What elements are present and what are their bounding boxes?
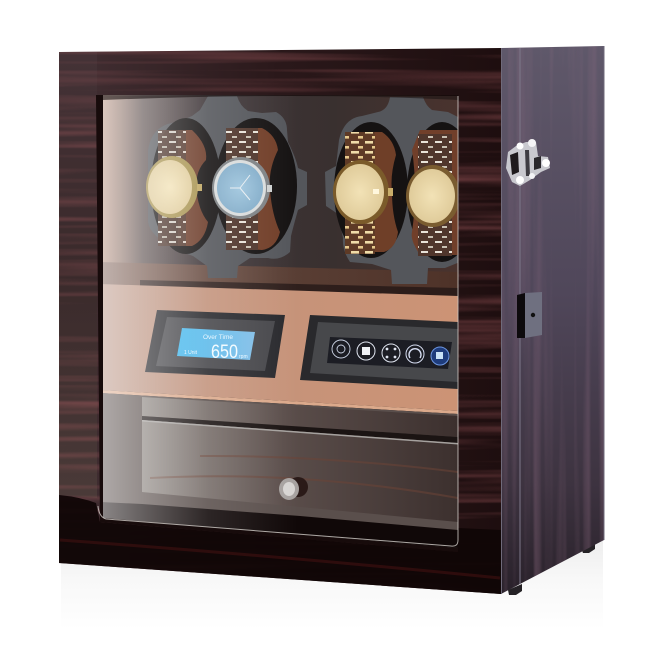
cushion — [186, 130, 208, 246]
cabinet side panel — [500, 40, 610, 600]
bracelet — [345, 132, 375, 254]
touch icon: settings — [332, 340, 350, 358]
bracelet — [418, 134, 452, 256]
bracelet — [158, 130, 186, 246]
cushion — [258, 128, 280, 250]
touch icon: active mode — [431, 347, 449, 365]
base under drawer — [100, 502, 458, 552]
watch holder opening — [334, 122, 408, 258]
upper compartment — [103, 95, 458, 272]
floor shadow — [61, 538, 603, 630]
bottom frame red grain — [60, 540, 500, 578]
touch icon: stop — [357, 342, 375, 360]
cabinet front frame in ebony wood — [55, 45, 505, 600]
cushion — [412, 130, 458, 255]
bracelet — [226, 128, 258, 250]
shelf shadow line — [142, 416, 458, 443]
LCD bezel — [145, 310, 285, 378]
drawer front — [142, 420, 458, 522]
LCD side label: 1 Unit — [184, 350, 198, 356]
bottom frame — [59, 495, 501, 594]
watch holder opening — [408, 122, 458, 262]
product illustration: watch winder cabinet — [59, 46, 604, 595]
watch two: blue dial — [212, 157, 272, 219]
drawer knob — [279, 477, 308, 500]
side key lock — [517, 292, 542, 338]
glass haze — [100, 92, 460, 552]
LCD speed: 650 — [211, 342, 238, 363]
LCD screen — [177, 328, 255, 360]
touch icon: four dots — [382, 344, 400, 362]
shelf strip — [142, 397, 458, 437]
glass door edge — [98, 96, 458, 546]
watch four: two tone — [406, 165, 460, 227]
touch icon: rotation — [406, 345, 424, 363]
glass door and interior — [100, 92, 477, 552]
LCD readout: Over Time — [203, 334, 233, 341]
watch one: cream dial — [146, 156, 202, 218]
touch panel bezel — [300, 315, 458, 389]
LCD unit: rpm — [239, 354, 248, 360]
cushion — [375, 132, 398, 252]
watch three: gold fluted bezel — [333, 160, 393, 224]
winder rotor: right — [325, 97, 458, 284]
watch holder opening — [215, 118, 297, 254]
inner dark reveal around the glass — [96, 95, 458, 552]
side latch in chrome — [506, 139, 550, 186]
dark wall under controls — [100, 393, 458, 552]
cabinet feet — [508, 542, 595, 595]
winder rotor: left — [146, 96, 307, 278]
control shelf in copper — [100, 284, 458, 414]
side panel door seam — [519, 48, 521, 584]
watch holder opening — [151, 118, 221, 254]
